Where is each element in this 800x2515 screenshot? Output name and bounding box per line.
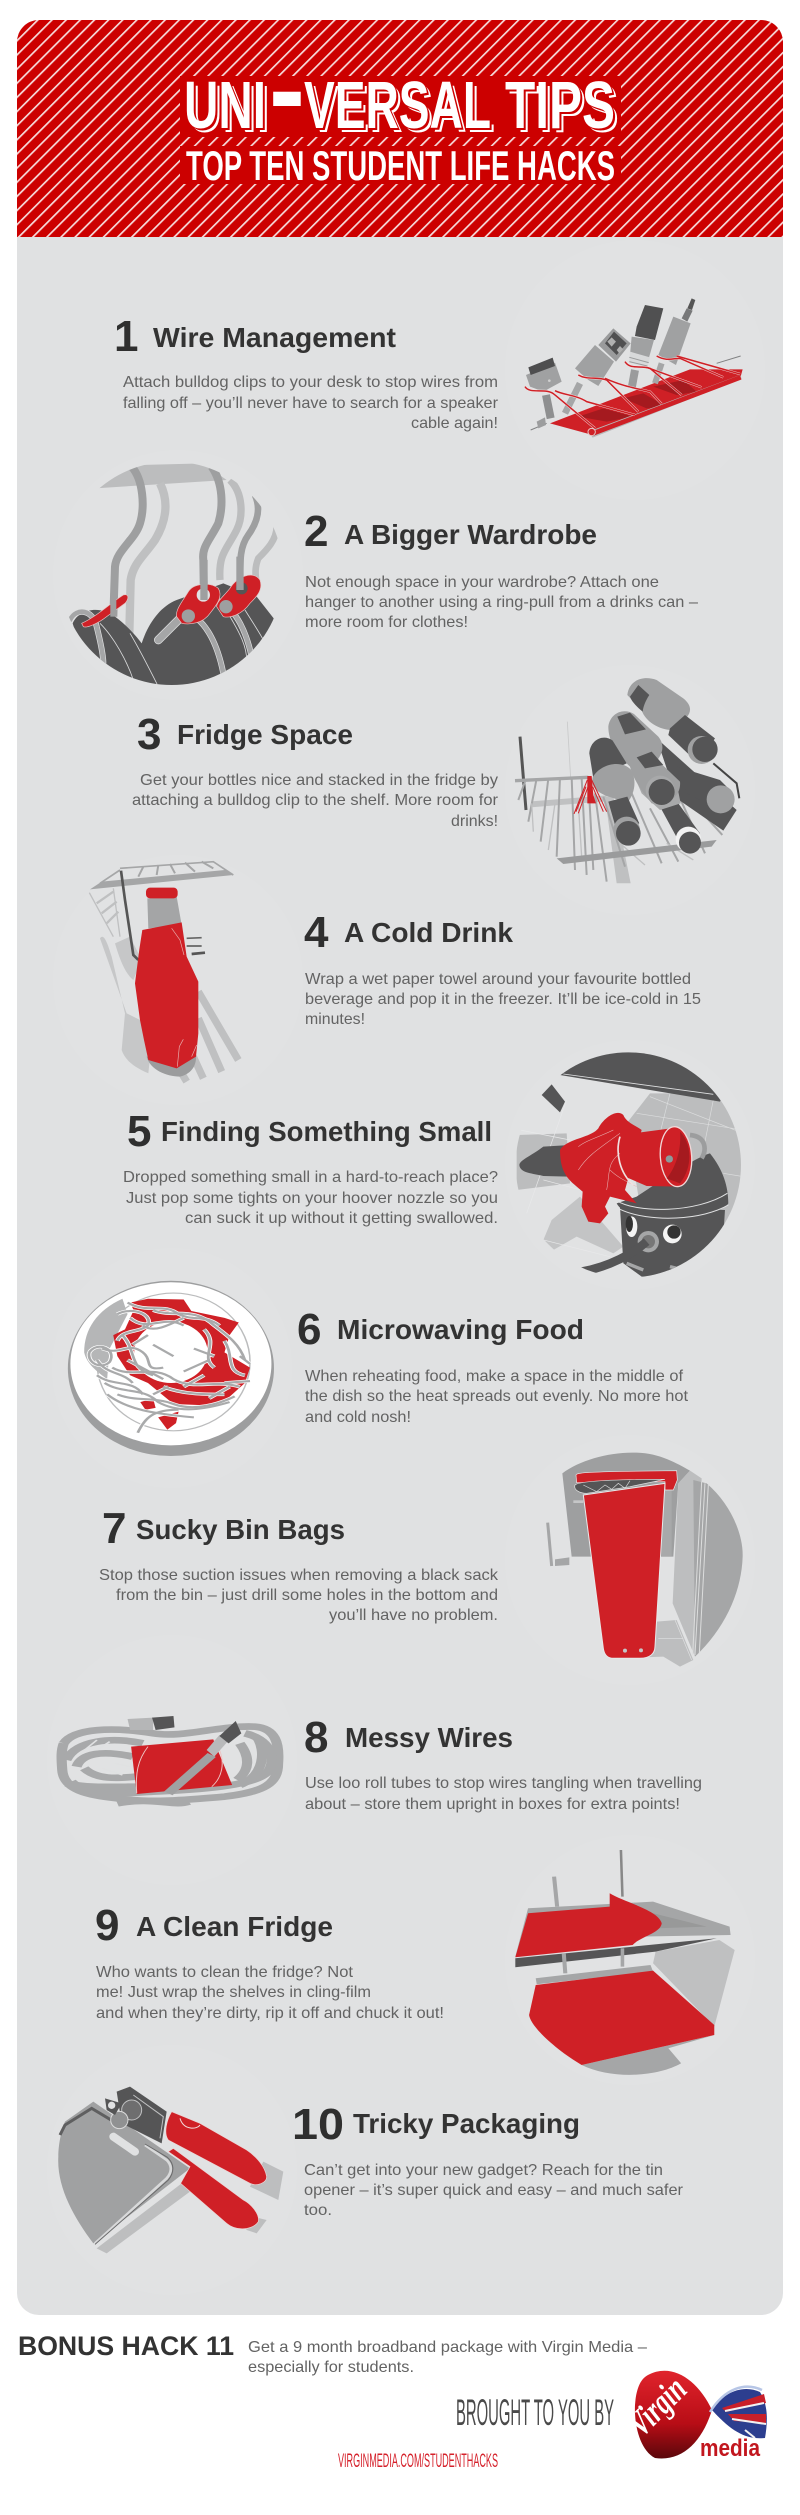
body text: Stop those suction issues when removing a black sack — [99, 1567, 499, 1584]
body text: Can’t get into your new gadget? Reach for the tin — [304, 2162, 663, 2179]
number 1: 1 — [114, 312, 138, 361]
body text: from the bin – just drill some holes in the bottom and — [116, 1587, 498, 1604]
number 5: 5 — [127, 1107, 151, 1156]
bonus text: Get a 9 month broadband package with Virgin Media – — [248, 2339, 647, 2356]
title: VERSAL — [308, 72, 495, 147]
tip 3: fridge space — [132, 678, 739, 883]
body text: drinks! — [451, 813, 498, 830]
number 10: 10 — [292, 2100, 344, 2149]
number 7: 7 — [102, 1504, 126, 1553]
icon: stacked bottles on fridge shelf — [515, 678, 739, 883]
logo word: media: media — [700, 2435, 761, 2462]
tip 7: sucky bin bags — [99, 1453, 743, 1667]
bonus text: especially for students. — [248, 2359, 414, 2376]
body text: Get your bottles nice and stacked in the fridge by — [140, 772, 498, 789]
body text: me! Just wrap the shelves in cling-film — [96, 1984, 371, 2001]
logo: virgin media — [619, 2369, 767, 2462]
tip 6: microwaving food — [68, 1281, 689, 1456]
title: TIPS — [507, 70, 617, 145]
title — [184, 22, 619, 156]
icon: tin opener and blister pack — [58, 2087, 283, 2253]
body text — [305, 1775, 702, 1813]
body text: When reheating food, make a space in the middle of — [305, 1368, 684, 1385]
icon: hangers linked with ring-pulls — [70, 463, 277, 693]
body text: and when they’re dirty, rip it off and chuck it out! — [96, 2005, 444, 2022]
tip 4: a cold drink — [89, 862, 701, 1082]
icon: fridge shelves wrapped in cling-film — [515, 1850, 735, 2075]
body text — [305, 574, 698, 631]
body text: opener – it’s super quick and easy – and much safer — [304, 2182, 684, 2199]
body text — [96, 1964, 444, 2022]
heading: Microwaving Food — [337, 1314, 584, 1345]
body text — [123, 374, 499, 432]
logo: virgin media: Virgin — [619, 2369, 694, 2444]
heading: Finding Something Small — [161, 1116, 492, 1147]
icon: bulldog clips holding plugs — [525, 298, 743, 438]
body text: the dish so the heat spreads out evenly. No more hot — [305, 1388, 689, 1405]
body text — [305, 1368, 689, 1426]
tip 2: a bigger wardrobe — [70, 463, 698, 693]
icon: plate of spaghetti — [68, 1281, 274, 1456]
number 2: 2 — [304, 507, 328, 556]
title: TIPS — [505, 68, 615, 143]
number 6: 6 — [297, 1305, 321, 1354]
title: UNI — [186, 70, 268, 145]
body text: Who wants to clean the fridge? Not — [96, 1964, 354, 1981]
tip 9: a clean fridge — [95, 1850, 735, 2075]
title: UNI — [188, 72, 270, 147]
header banner — [17, 20, 783, 237]
heading: Tricky Packaging — [353, 2108, 580, 2139]
number 4: 4 — [304, 908, 329, 957]
title: VERSAL — [306, 70, 493, 145]
tip 1: wire management — [114, 298, 743, 438]
heading: Fridge Space — [177, 719, 353, 750]
number 3: 3 — [137, 710, 161, 759]
tip 5: finding something small — [123, 1050, 750, 1283]
bonus heading: BONUS HACK 11 — [18, 2331, 234, 2361]
icon: nozzle — [618, 1126, 694, 1188]
body text: you’ll have no problem. — [329, 1607, 498, 1624]
body text: falling off – you’ll never have to search for a speaker — [123, 395, 499, 412]
body text: can suck it up without it getting swallowed. — [185, 1210, 498, 1227]
icon: hoover with tights on nozzle — [517, 1050, 750, 1283]
body text: attaching a bulldog clip to the shelf. More room for — [132, 792, 499, 809]
number 9: 9 — [95, 1901, 119, 1950]
heading: A Bigger Wardrobe — [344, 519, 597, 550]
number 8: 8 — [304, 1713, 328, 1762]
body text: hanger to another using a ring-pull from a drinks can – — [305, 594, 698, 611]
body text: more room for clothes! — [305, 614, 468, 631]
body text: beverage and pop it in the freezer. It’ll be ice-cold in 15 — [305, 991, 701, 1008]
icon: red bin — [548, 1453, 743, 1667]
title: - — [269, 22, 305, 156]
body text: too. — [304, 2202, 332, 2219]
heading: Sucky Bin Bags — [136, 1514, 345, 1545]
body text: Use loo roll tubes to stop wires tangling when travelling — [305, 1775, 702, 1792]
icon: coiled cables around tube — [62, 1716, 278, 1803]
heading: A Cold Drink — [344, 917, 513, 948]
icon: wrapped bottle under freezer shelf — [89, 862, 238, 1082]
tip 10: tricky packaging — [58, 2087, 684, 2253]
body text — [99, 1567, 499, 1624]
text: VIRGINMEDIA.COM/STUDENTHACKS — [338, 2451, 498, 2472]
icon: ring-pulls — [82, 557, 261, 627]
body text — [123, 1169, 498, 1227]
body text: Not enough space in your wardrobe? Attach one — [305, 574, 659, 591]
body text — [304, 2162, 684, 2219]
icon: red tights — [560, 1113, 642, 1223]
body text: Attach bulldog clips to your desk to stop wires from — [123, 374, 498, 391]
body text — [132, 772, 499, 830]
bonus text — [248, 2339, 647, 2376]
body text — [305, 971, 701, 1028]
body text: about – store them upright in boxes for extra points! — [305, 1796, 680, 1813]
bonus hack — [18, 2331, 647, 2376]
heading: A Clean Fridge — [136, 1911, 333, 1942]
title: VERSAL — [304, 68, 491, 143]
body text: Just pop some tights on your hoover nozzle so you — [126, 1190, 498, 1207]
body text: Wrap a wet paper towel around your favourite bottled — [305, 971, 691, 988]
heading: Messy Wires — [345, 1722, 513, 1753]
tip 8: messy wires — [62, 1713, 702, 1813]
body text: minutes! — [305, 1011, 365, 1028]
body text: cable again! — [411, 415, 498, 432]
body text: Dropped something small in a hard-to-reach place? — [123, 1169, 498, 1186]
heading: Wire Management — [153, 322, 396, 353]
icon: red clip on shelf — [574, 776, 607, 814]
title: TIPS — [509, 72, 619, 147]
body text: and cold nosh! — [305, 1409, 411, 1426]
title: UNI — [184, 68, 266, 143]
